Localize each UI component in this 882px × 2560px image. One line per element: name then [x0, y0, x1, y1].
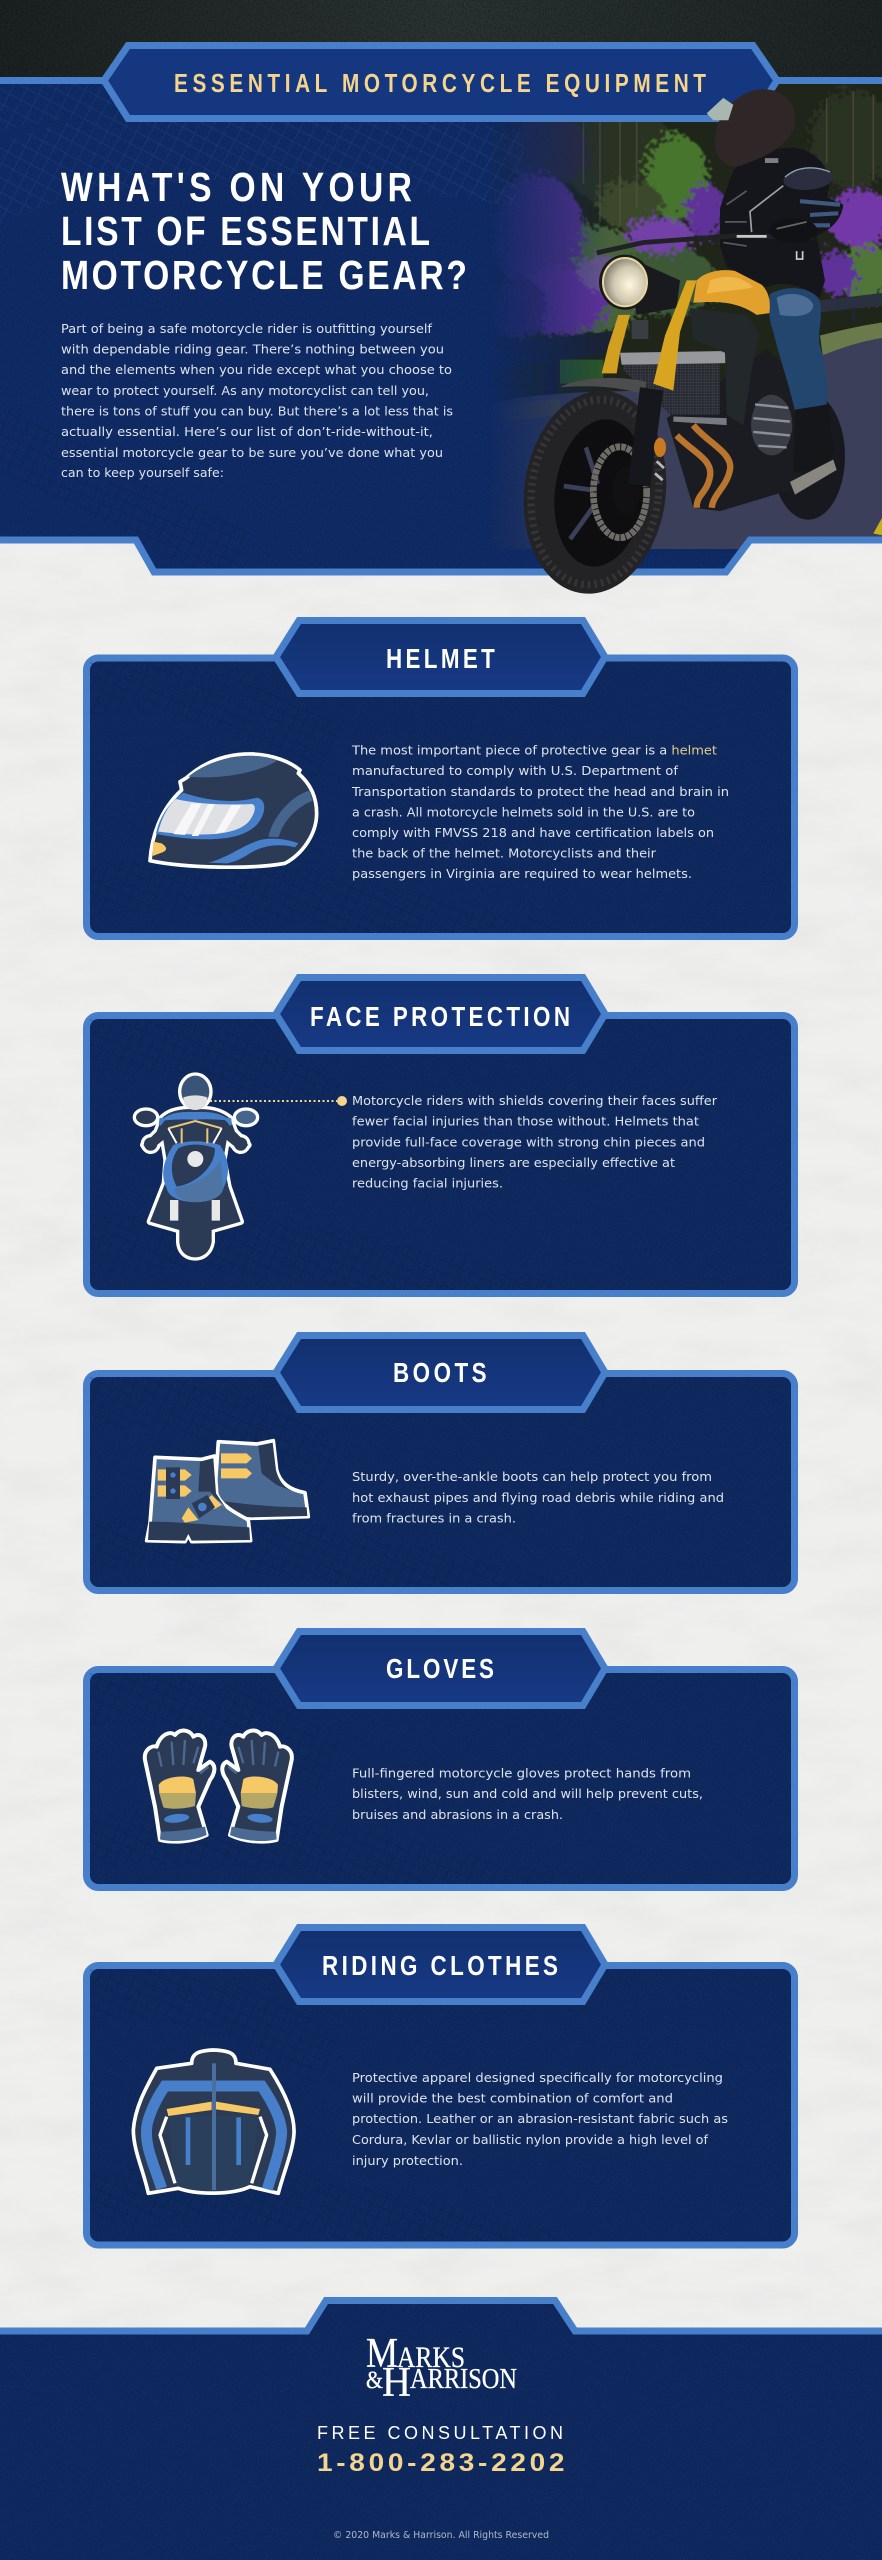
heading: BOOTS: [393, 1358, 487, 1389]
description: a crash. All motorcycle helmets sold in the U.S. are to: [352, 804, 695, 820]
tire tracks: [90, 1377, 94, 1380]
description: from fractures in a crash.: [352, 1510, 516, 1526]
description: energy-absorbing liners are especially effective at: [352, 1155, 675, 1170]
heading: GLOVES: [386, 1654, 494, 1685]
logo: Marks & Harrison: ARKS: [397, 2341, 465, 2374]
description: fewer facial injuries than those without. Helmets that: [352, 1114, 699, 1128]
description: provide full-face coverage with strong chin pieces and: [352, 1134, 705, 1150]
heading: FACE PROTECTION: [310, 1002, 570, 1033]
motorcycle and rider illustration: [511, 89, 845, 603]
helmet: [707, 89, 795, 167]
banner title text: ESSENTIAL MOTORCYCLE EQUIPMENT: [174, 69, 707, 98]
intro paragraph: [61, 321, 453, 480]
right boot: [213, 1441, 308, 1518]
intro paragraph: there is tons of stuff you can buy. But there’s a lot less that is: [61, 404, 453, 418]
panel: riding clothes: [70, 1928, 794, 2259]
description: Transportation standards to protect the head and brain in: [351, 784, 729, 799]
description: comply with FMVSS 218 and have certification labels on: [352, 825, 714, 840]
description: injury protection.: [352, 2153, 463, 2168]
section tab: [276, 620, 605, 694]
panel: gloves: [70, 1632, 794, 1903]
main heading: WHAT'S ON YOUR: [61, 164, 412, 210]
forks: [602, 280, 697, 391]
jacket: [720, 148, 843, 298]
top dark strip: [0, 0, 882, 82]
description: the back of the helmet. Motorcyclists and their: [352, 846, 657, 860]
main heading: LIST OF ESSENTIAL: [61, 208, 430, 254]
mirror: [750, 166, 834, 232]
description: passengers in Virginia are required to wear helmets.: [352, 866, 692, 881]
jeans: [769, 288, 827, 411]
section tab: [276, 1928, 605, 2002]
icon: jacket: [133, 2050, 294, 2193]
radiator: [620, 351, 727, 425]
side cover: [690, 308, 760, 425]
footer: [0, 2300, 882, 2560]
icon: boots: [147, 1441, 308, 1542]
section tab: [276, 1336, 605, 1410]
panel: boots: [70, 1336, 794, 1607]
description: hot exhaust pipes and flying road debris while riding and: [352, 1490, 724, 1505]
description: The most important piece of protective gear is a helmet: [351, 742, 717, 758]
tire tracks: [90, 662, 93, 664]
title banner: [104, 46, 777, 118]
brake disc: [593, 447, 647, 538]
description: manufactured to comply with U.S. Department of: [352, 763, 679, 778]
description: Motorcycle riders with shields covering their faces suffer: [352, 1093, 718, 1108]
logo: Marks & Harrison: &: [366, 2367, 383, 2394]
description: will provide the best combination of comfort and: [352, 2090, 673, 2106]
description: [351, 742, 729, 881]
icon: gloves: [145, 1731, 292, 1842]
engine: [667, 349, 813, 511]
description: bruises and abrasions in a crash.: [352, 1807, 563, 1822]
copyright: © 2020 Marks & Harrison. All Rights Reserved: [333, 2530, 549, 2541]
section tab: [276, 978, 605, 1050]
intro paragraph: Part of being a safe motorcycle rider is outfitting yourself: [61, 321, 433, 336]
front wheel: [511, 381, 679, 603]
intro paragraph: wear to protect yourself. As any motorcyclist can tell you,: [61, 383, 429, 398]
main heading: MOTORCYCLE GEAR?: [61, 252, 467, 298]
description: Full-fingered motorcycle gloves protect hands from: [352, 1766, 691, 1780]
intro paragraph: can to keep yourself safe:: [61, 465, 224, 480]
heading: HELMET: [386, 644, 495, 675]
tire tracks: [90, 1969, 94, 1972]
description: protection. Leather or an abrasion-resistant fabric such as: [352, 2111, 728, 2126]
front fork lower and fender: [560, 378, 666, 487]
right glove: [222, 1731, 292, 1842]
logo: Marks & Harrison: ARRISON: [410, 2363, 517, 2395]
handlebar and glove: [597, 218, 817, 253]
free consultation label: FREE CONSULTATION: [317, 2423, 563, 2443]
hero tire track texture: [0, 93, 520, 560]
intro paragraph: with dependable riding gear. There’s nothing between you: [61, 342, 444, 356]
logo: Marks & Harrison: H: [382, 2360, 411, 2406]
phone number: 1-800-283-2202: [317, 2448, 565, 2477]
top header line: [0, 77, 882, 84]
tire tracks: [90, 1019, 94, 1022]
section tab: [276, 1632, 605, 1706]
description: Sturdy, over-the-ankle boots can help protect you from: [352, 1469, 712, 1484]
hero photo background: forest, flowers, guard rail and road: [480, 81, 882, 549]
description: Protective apparel designed specifically for motorcycling: [352, 2070, 723, 2085]
icon: helmet: [150, 754, 317, 867]
exhaust pipes: [677, 425, 730, 508]
logo: Marks & Harrison: [366, 2331, 517, 2406]
heading: RIDING CLOTHES: [322, 1951, 558, 1982]
intro paragraph: actually essential. Here’s our list of don’t-ride-without-it,: [61, 424, 433, 439]
left glove: [145, 1731, 214, 1842]
description: Cordura, Kevlar or ballistic nylon provide a high level of: [352, 2132, 709, 2147]
tire tracks: [90, 1673, 94, 1676]
description: [352, 1766, 703, 1822]
rear wheel: [772, 392, 845, 520]
headlight: [599, 255, 680, 315]
left boot: [147, 1456, 251, 1542]
description: reducing facial injuries.: [352, 1176, 503, 1190]
description: [352, 1093, 718, 1190]
fuel tank: [693, 270, 770, 315]
description: [352, 2070, 728, 2168]
main heading: [61, 164, 467, 298]
intro paragraph: and the elements when you ride except what you choose to: [61, 362, 452, 377]
hero panel: [0, 81, 882, 572]
boot: [790, 404, 837, 495]
description: blisters, wind, sun and cold and will help prevent cuts,: [352, 1786, 703, 1801]
icon: rider front view: [136, 1076, 256, 1257]
panel: helmet: [70, 620, 794, 952]
callout dotted line: [210, 1096, 347, 1106]
panel: face protection: [70, 978, 794, 1309]
description: [352, 1469, 724, 1526]
logo: Marks & Harrison: M: [366, 2331, 398, 2377]
hero bottom border: [0, 540, 882, 572]
intro paragraph: essential motorcycle gear to be sure you’ve done what you: [61, 445, 443, 460]
